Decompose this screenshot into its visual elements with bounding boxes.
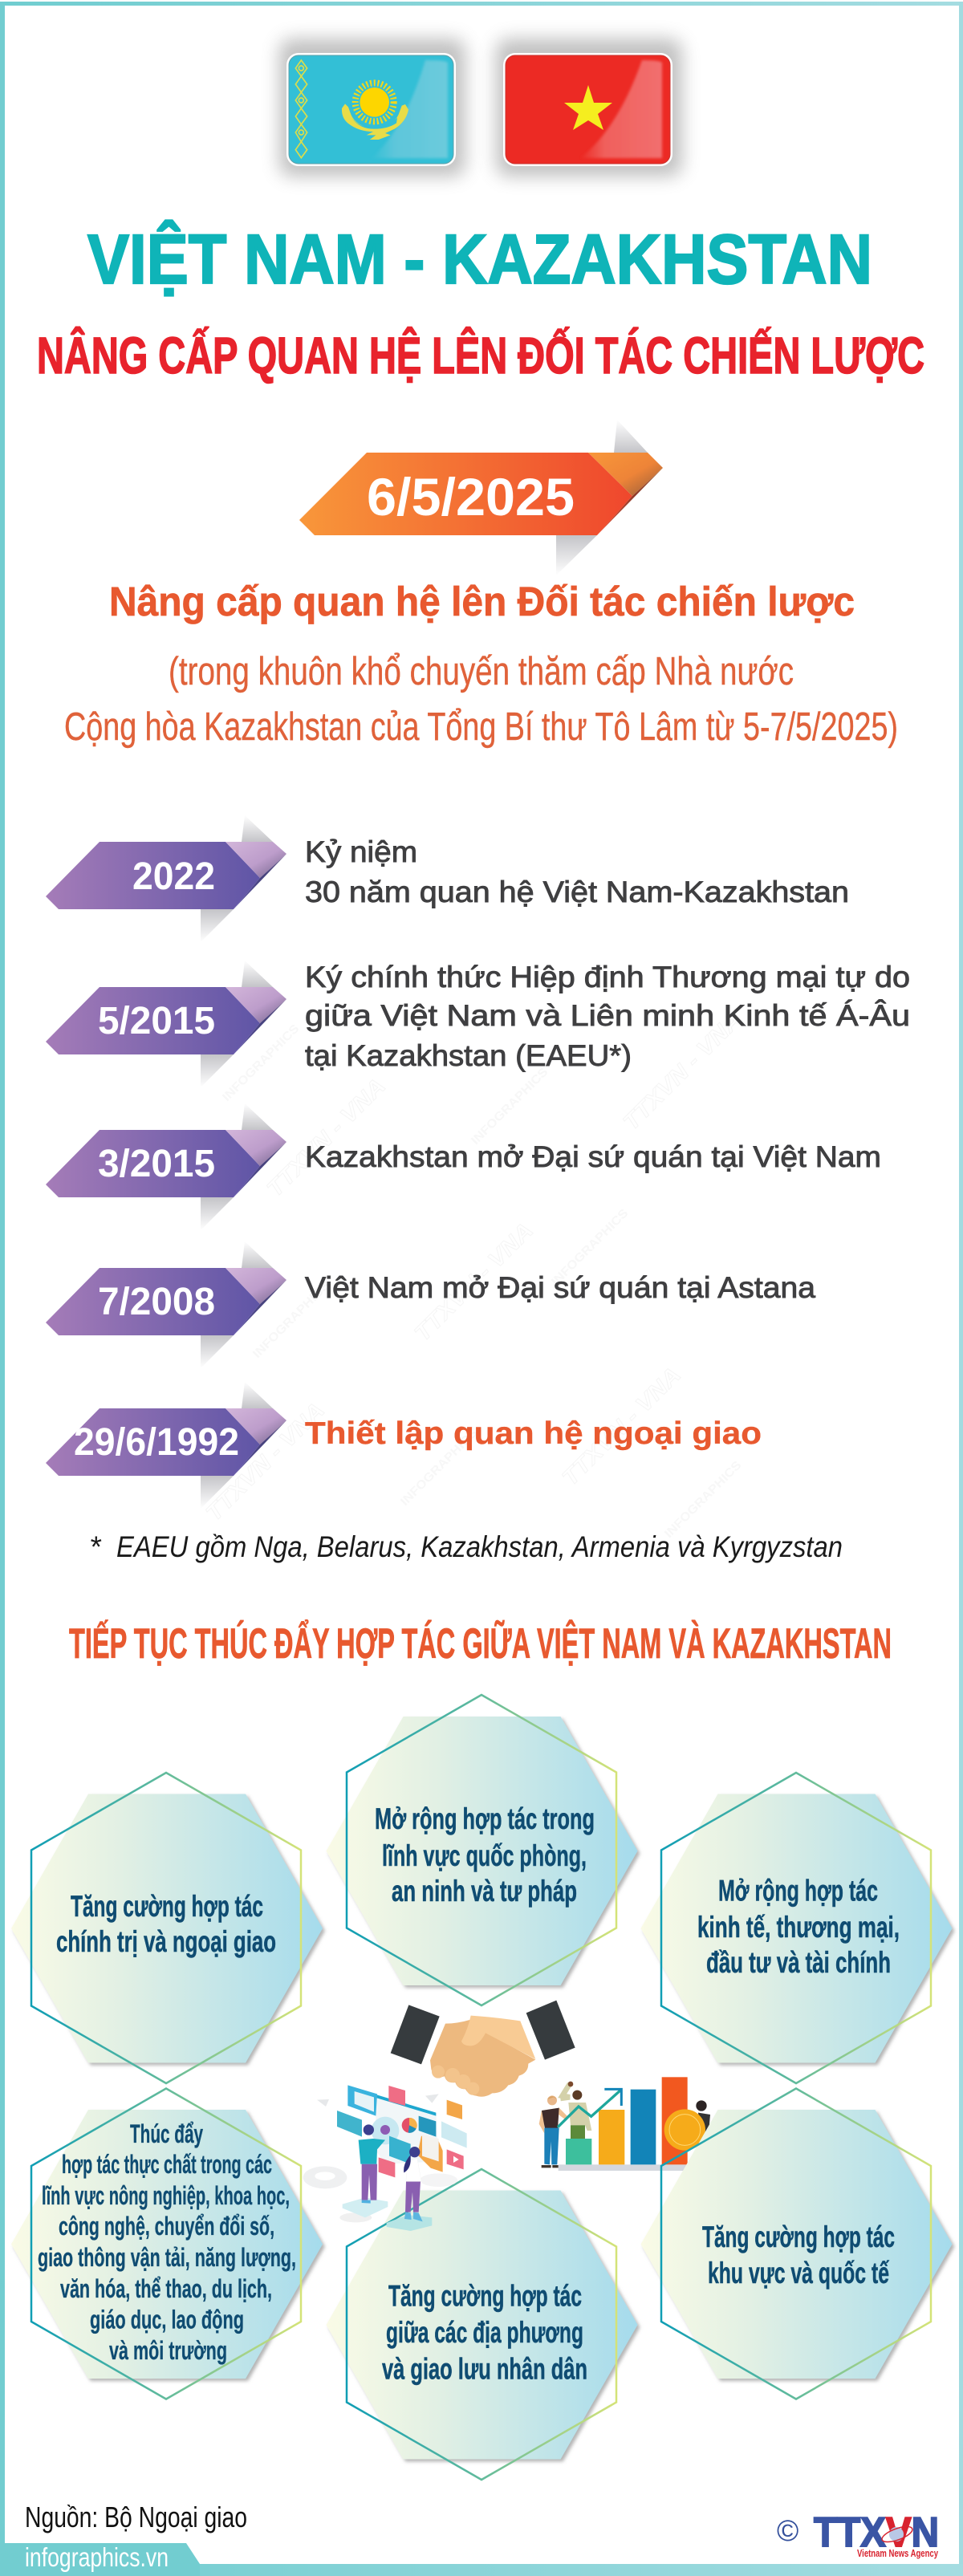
- watermarks: INFOGRAPHICS: [250, 1278, 332, 1361]
- panel: substantive cooperation: hợp tác thực chất trong các: [62, 2150, 272, 2179]
- panel: substantive cooperation: giáo dục, lao động: [90, 2305, 244, 2334]
- timeline: 5/2015: 5/2015: [98, 1000, 215, 1042]
- panel: economic cooperation: đầu tư và tài chính: [706, 1946, 891, 1979]
- text block: visit context: (trong khuôn khổ chuyến thăm cấp Nhà nước: [169, 650, 794, 693]
- footer tab: infographics.vn: [25, 2542, 169, 2572]
- watermarks: TTXVN - VNA: [409, 1217, 538, 1346]
- timeline: 2022: 2022: [132, 855, 215, 898]
- panel: political cooperation: [11, 1773, 323, 2083]
- panel: substantive cooperation: công nghệ, chuyển đổi số,: [59, 2212, 274, 2241]
- watermarks: INFOGRAPHICS: [220, 1022, 302, 1104]
- panel: political cooperation: chính trị và ngoại giao: [56, 1925, 276, 1958]
- watermarks: INFOGRAPHICS: [549, 1206, 631, 1289]
- watermarks: TTXVN - VNA: [618, 1006, 746, 1135]
- timeline: 5/2015: giữa Việt Nam và Liên minh Kinh tế Á-Âu: [305, 999, 910, 1032]
- panel: political cooperation: Tăng cường hợp tác: [71, 1890, 263, 1923]
- timeline: 29/6/1992: Thiết lập quan hệ ngoại giao: [305, 1416, 762, 1451]
- panel: substantive cooperation: và môi trường: [109, 2336, 227, 2365]
- timeline: 29/6/1992: [46, 1382, 762, 1509]
- icon: handshake: [391, 2001, 575, 2097]
- icon: Kazakhstan flag: [279, 39, 465, 177]
- watermarks: INFOGRAPHICS: [662, 1458, 744, 1541]
- timeline: 2022: Kỷ niệm: [305, 835, 417, 868]
- date: 6/5/2025: [367, 467, 575, 526]
- panel: defence cooperation: [326, 1695, 637, 2005]
- watermarks: [201, 1006, 746, 1541]
- date badge: [299, 420, 663, 575]
- panel: local exchange: Tăng cường hợp tác: [388, 2279, 582, 2313]
- timeline: 3/2015: Kazakhstan mở Đại sứ quán tại Việt Nam: [305, 1140, 881, 1173]
- timeline: 2022: 30 năm quan hệ Việt Nam-Kazakhstan: [305, 876, 849, 908]
- title: VIỆT NAM - KAZAKHSTAN: [87, 221, 872, 299]
- watermarks: INFOGRAPHICS: [469, 1065, 551, 1148]
- watermarks: TTXVN - VNA: [557, 1362, 685, 1490]
- timeline: 5/2015: tại Kazakhstan (EAEU*): [305, 1039, 632, 1072]
- panel: substantive cooperation: giao thông vận tải, năng lượng,: [38, 2243, 296, 2272]
- panel: substantive cooperation: văn hóa, thể thao, du lịch,: [60, 2274, 272, 2303]
- panel: substantive cooperation: Thúc đẩy: [130, 2119, 203, 2148]
- panel: local exchange: và giao lưu nhân dân: [382, 2353, 587, 2385]
- illustration: growth chart with people: [539, 2077, 710, 2176]
- illustration: data analysts: [303, 2085, 467, 2231]
- footnote: EAEU gồm Nga, Belarus, Kazakhstan, Armenia và Kyrgyzstan: [116, 1530, 843, 1563]
- panel: local exchange: [326, 2169, 637, 2480]
- timeline: 7/2008: 7/2008: [98, 1281, 215, 1323]
- text block: visit context: [64, 650, 898, 749]
- timeline: 3/2015: 3/2015: [98, 1143, 215, 1185]
- logo: TTXVN: ©: [777, 2514, 798, 2547]
- panel: defence cooperation: Mở rộng hợp tác trong: [375, 1802, 595, 1835]
- timeline: 5/2015: [46, 961, 910, 1087]
- panel: economic cooperation: Mở rộng hợp tác: [718, 1875, 878, 1907]
- panel: defence cooperation: lĩnh vực quốc phòng,: [382, 1839, 587, 1872]
- panel: defence cooperation: an ninh và tư pháp: [392, 1875, 577, 1908]
- timeline: 5/2015: Ký chính thức Hiệp định Thương mại tự do: [305, 961, 910, 993]
- timeline: 29/6/1992: 29/6/1992: [74, 1421, 239, 1464]
- watermarks: TTXVN - VNA: [201, 1397, 329, 1526]
- timeline: 3/2015: [46, 1103, 881, 1230]
- panel: regional cooperation: [640, 2088, 952, 2399]
- source: Nguồn: Bộ Ngoại giao: [25, 2501, 247, 2533]
- timeline: 7/2008: Việt Nam mở Đại sứ quán tại Astana: [305, 1271, 815, 1304]
- watermarks: TTXVN - VNA: [262, 1073, 390, 1201]
- panel: local exchange: giữa các địa phương: [386, 2316, 583, 2349]
- watermarks: INFOGRAPHICS: [398, 1426, 480, 1509]
- footnote: *: [89, 1530, 102, 1563]
- timeline: 2022: [46, 815, 849, 942]
- panel: substantive cooperation: lĩnh vực nông nghiệp, khoa học,: [42, 2181, 290, 2210]
- icon: Vietnam flag: [496, 39, 682, 177]
- heading: upgrade: Nâng cấp quan hệ lên Đối tác chiến lược: [109, 579, 855, 624]
- panel: economic cooperation: [640, 1773, 952, 2083]
- panel: substantive cooperation: [11, 2088, 323, 2399]
- timeline: 7/2008: [46, 1241, 815, 1368]
- logo: TTXVN: TTXVN: [814, 2509, 939, 2556]
